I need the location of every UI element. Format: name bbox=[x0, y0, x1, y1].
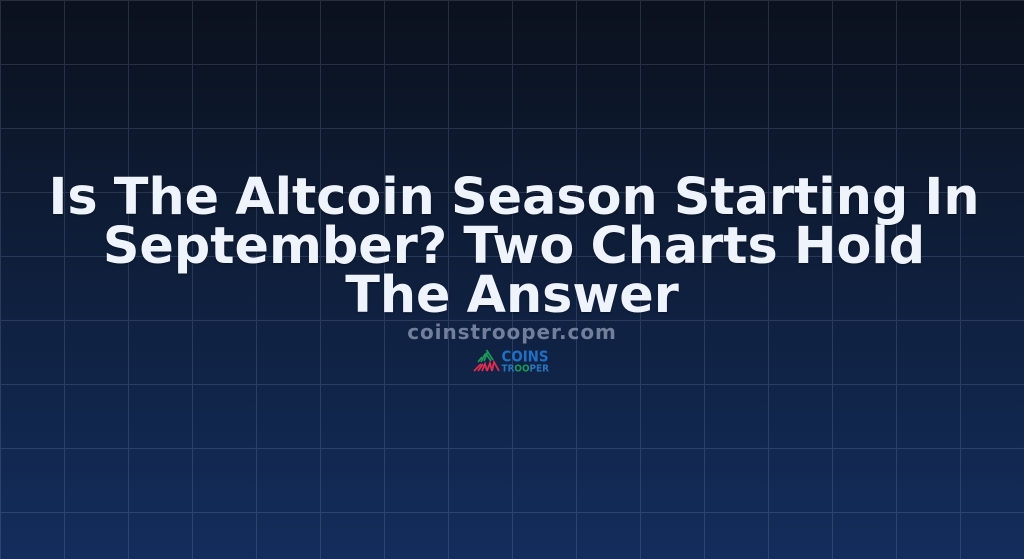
website label: coinstrooper.com bbox=[407, 320, 617, 344]
title: Is The Altcoin Season Starting In bbox=[48, 167, 980, 226]
logo: Coins Trooper bbox=[473, 348, 550, 374]
title: September? Two Charts Hold bbox=[103, 216, 925, 275]
icon: green upward stripes bbox=[478, 350, 493, 362]
title bbox=[48, 167, 980, 324]
title: The Answer bbox=[345, 265, 679, 324]
icon: red chart stripes bbox=[474, 362, 499, 371]
